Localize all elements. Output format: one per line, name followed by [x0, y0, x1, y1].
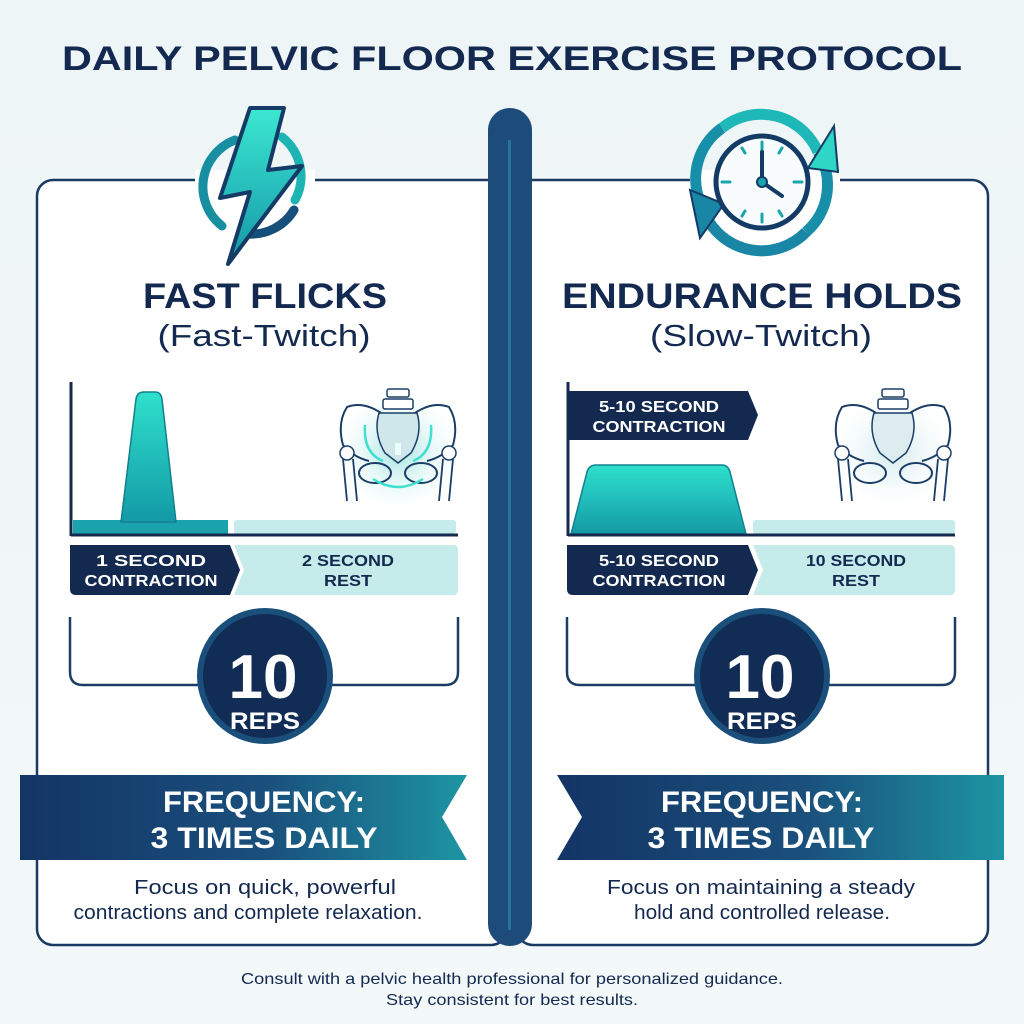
label: 2 second rest: REST — [324, 573, 372, 590]
badge: 10 reps: 10 — [726, 643, 794, 712]
label: top contraction: 5-10 SECOND — [599, 399, 719, 416]
banner: frequency — [20, 775, 467, 860]
footer — [241, 971, 783, 1009]
label: 5-10 second contraction: 5-10 SECOND — [599, 553, 719, 570]
bracket — [70, 617, 458, 685]
subheading: (Slow-Twitch) — [650, 318, 872, 353]
icon: clock — [690, 114, 838, 251]
banner: frequency: 3 TIMES DAILY — [150, 822, 378, 855]
badge: 10 reps: 10 — [229, 643, 297, 712]
footer: Stay consistent for best results. — [386, 992, 638, 1009]
heading: fast flicks: FAST FLICKS — [143, 277, 387, 316]
panel: endurance holds — [517, 114, 1004, 945]
label: 10 second rest: REST — [832, 573, 880, 590]
banner: frequency: FREQUENCY: — [163, 786, 365, 819]
badge: 10 reps: REPS — [727, 708, 797, 735]
bracket — [567, 617, 955, 685]
banner: frequency: 3 TIMES DAILY — [648, 822, 874, 855]
text: description — [74, 877, 423, 924]
text: description: Focus on maintaining a steady — [607, 877, 915, 899]
text: description: hold and controlled release. — [634, 902, 890, 924]
divider — [488, 108, 532, 946]
label: top contraction — [568, 391, 758, 440]
label: 1 second contraction: CONTRACTION — [84, 573, 218, 590]
icon: lightning bolt — [203, 108, 302, 264]
subheading: (Fast-Twitch) — [158, 318, 370, 353]
chart: endurance hold — [567, 382, 955, 595]
footer: Consult with a pelvic health professional for personalized guidance. — [241, 971, 783, 988]
label: 2 second rest — [234, 545, 458, 595]
label: 1 second contraction — [70, 545, 240, 595]
panel: fast flicks — [20, 108, 507, 945]
text: description: Focus on quick, powerful — [134, 877, 396, 899]
badge: 10 reps: REPS — [230, 708, 300, 735]
text: description — [607, 877, 915, 924]
banner: frequency: FREQUENCY: — [661, 786, 863, 819]
label: 2 second rest: 2 SECOND — [302, 553, 394, 570]
label: 10 second rest: 10 SECOND — [806, 553, 906, 570]
badge: 10 reps — [694, 608, 830, 744]
label: 5-10 second contraction: CONTRACTION — [592, 573, 726, 590]
chart: fast contraction — [70, 382, 458, 595]
label: 1 second contraction: 1 SECOND — [96, 553, 206, 570]
text: description: contractions and complete relaxation. — [74, 902, 423, 924]
badge: 10 reps — [197, 608, 333, 744]
icon: pelvis — [831, 385, 955, 505]
label: 5-10 second contraction — [567, 545, 758, 595]
label: 10 second rest — [753, 545, 955, 595]
banner: frequency — [557, 775, 1004, 860]
title: DAILY PELVIC FLOOR EXERCISE PROTOCOL — [62, 40, 962, 78]
heading: endurance holds: ENDURANCE HOLDS — [562, 277, 962, 316]
label: top contraction: CONTRACTION — [592, 419, 726, 436]
icon: pelvis highlighted — [336, 385, 460, 505]
